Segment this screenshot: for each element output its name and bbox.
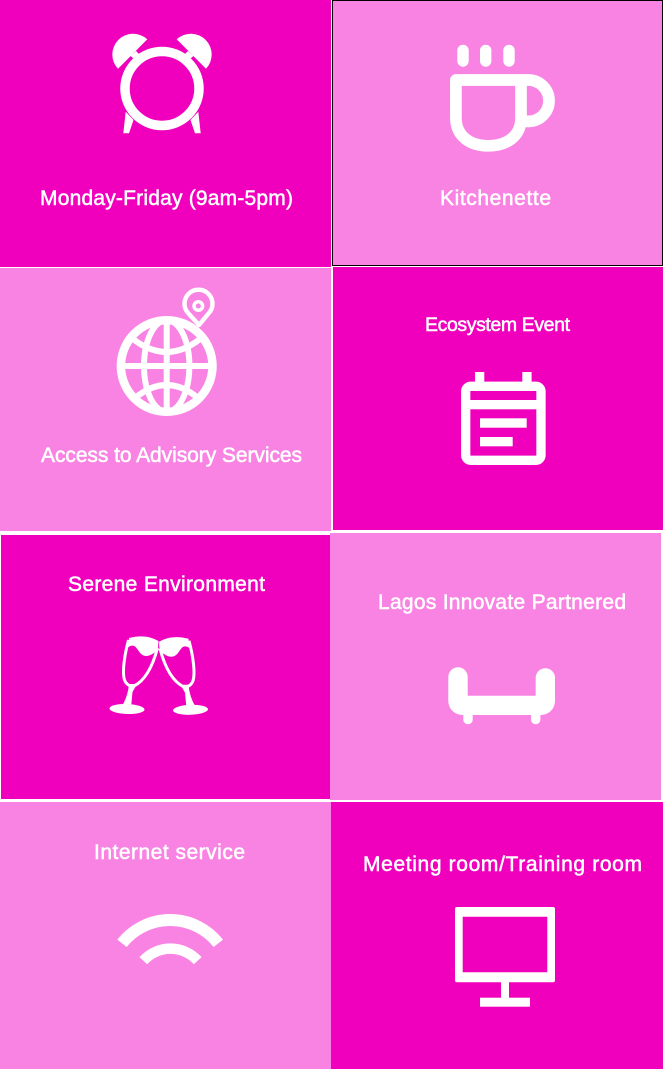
label: Advisory services: Access to Advisory Services xyxy=(41,444,302,467)
icon: sofa xyxy=(448,667,555,724)
icon: globe with location pin xyxy=(121,290,213,412)
icon: steaming mug xyxy=(456,45,549,146)
panel: Meeting room xyxy=(331,802,663,1069)
icon: calendar xyxy=(465,372,541,460)
panel: Kitchenette xyxy=(332,0,662,266)
panel: Internet service xyxy=(0,802,331,1069)
panel: Serene Environment xyxy=(1,535,330,799)
label: Serene Environment: Serene Environment xyxy=(68,573,265,596)
icon: monitor xyxy=(455,907,555,1007)
panel: Lagos Innovate Partnered xyxy=(330,533,661,800)
panel: Advisory services xyxy=(0,268,331,531)
label: Internet service: Internet service xyxy=(94,841,245,864)
panel: Monday-Friday hours xyxy=(0,0,331,267)
label: Ecosystem Event: Ecosystem Event xyxy=(425,314,571,336)
left glass xyxy=(109,636,158,715)
icon: wifi signal xyxy=(122,920,218,961)
panel: Ecosystem Event xyxy=(333,267,663,530)
icon: alarm clock xyxy=(112,34,212,133)
label: Kitchenette: Kitchenette xyxy=(440,187,551,210)
right glass xyxy=(159,637,208,715)
icon: clinking wine glasses xyxy=(109,636,208,715)
label: Meeting room: Meeting room/Training room xyxy=(363,853,642,876)
label: Lagos Innovate Partnered: Lagos Innovate Partnered xyxy=(378,591,626,614)
label: hours: Monday-Friday (9am-5pm) xyxy=(40,187,293,210)
